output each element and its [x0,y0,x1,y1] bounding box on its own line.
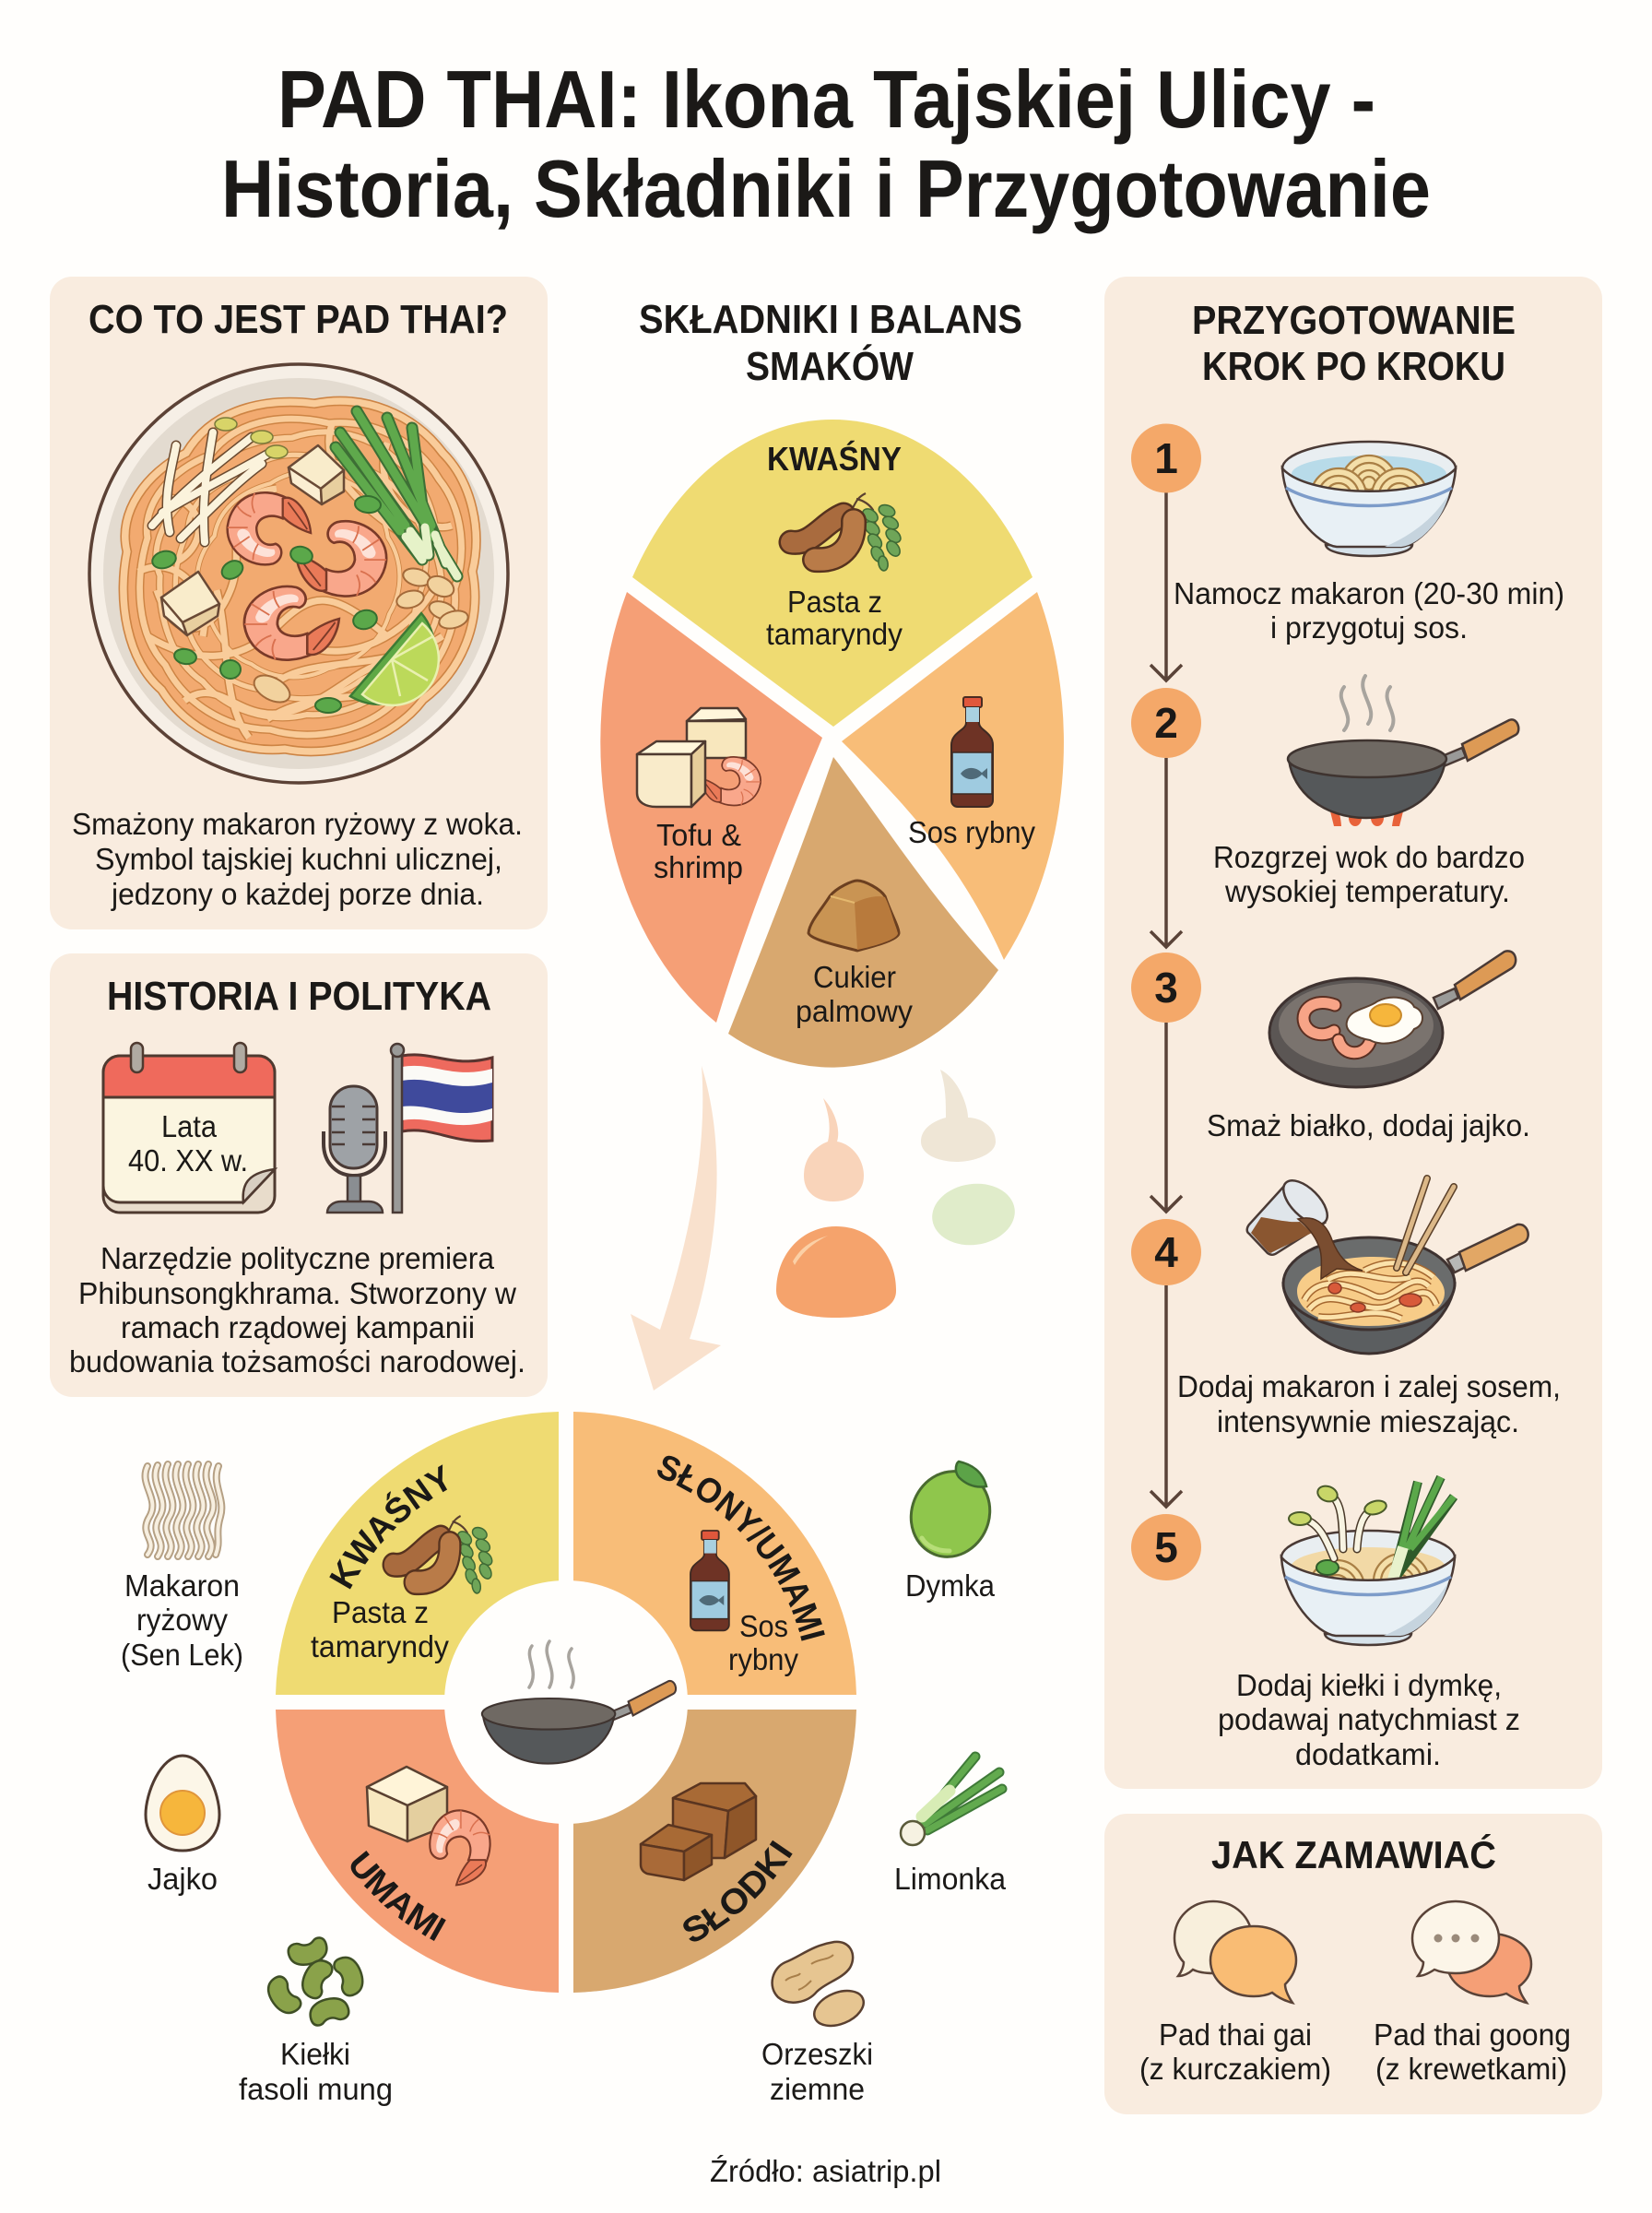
segment: cukier palmowy: Cukier [813,960,896,994]
ingredient: kielki fasoli mung: fasoli mung [239,2072,393,2106]
panel: jak zamawiac [1104,1814,1602,2114]
icon: thai flag [391,1044,492,1213]
calendar text [128,1109,248,1178]
segment: kwasny [632,420,1032,727]
ingredient: makaron ryzowy: Makaron [124,1568,240,1603]
green onions [336,411,457,576]
peanuts [250,565,470,707]
step 2: Rozgrzej wok do bardzo [1213,840,1525,874]
sector: slony umami [573,1412,856,1695]
chart: flavour pie [600,420,1064,1068]
sector labels [311,1595,798,1676]
text: pad thai goong [1374,2018,1571,2086]
ingredient: kielki fasoli mung: Kiełki [280,2037,350,2071]
text block: history: Phibunsongkhrama. Stworzony w [78,1276,516,1310]
text block: description: Symbol tajskiej kuchni ulicznej, [95,842,502,876]
sector labels: Pasta z [332,1595,429,1629]
decorative flavour blobs [776,1070,1019,1318]
heading: co to jest: CO TO JEST PAD THAI? [88,297,508,342]
text: pad thai goong: Pad thai goong [1374,2018,1571,2052]
icon: tofu and shrimp [637,708,761,807]
sector: slodki [573,1710,856,1993]
icon: pan with shrimp and egg [1269,951,1516,1087]
text block: history: budowania tożsamości narodowej. [69,1344,525,1379]
sprouts [152,432,268,542]
sector labels: rybny [728,1642,798,1676]
sector: umami [276,1710,559,1993]
step 2: wysokiej temperatury. [1224,874,1510,908]
icon: peanuts [773,1942,868,2032]
step 5: dodatkami. [1295,1737,1441,1771]
icon: microphone [324,1086,385,1213]
sector: slodki: SŁODKI [683,1840,793,1942]
ingredient: kielki fasoli mung [239,1936,393,2106]
step 2: 2 [1154,699,1178,747]
icon: speech bubbles chicken [1174,1901,1296,2003]
ingredient: limonka: Limonka [894,1862,1007,1896]
segment: cukier palmowy: palmowy [796,994,913,1028]
title: PAD THAI: Ikona Tajskiej Ulicy - [277,53,1375,145]
heading: skladniki i balans smakow [639,297,1022,389]
text block: history: ramach rządowej kampanii [121,1310,475,1344]
icon: tofu and shrimp [367,1767,490,1885]
shrimp [228,492,311,564]
text block: description: Smażony makaron ryżowy z woka. [72,807,523,841]
heading: skladniki i balans smakow: SMAKÓW [746,343,914,389]
segment: sos rybny: Sos rybny [908,815,1035,849]
heading: skladniki i balans smakow: SKŁADNIKI I BALANS [639,297,1022,342]
segment: kwasny: Pasta z [787,585,882,619]
heading: historia: HISTORIA I POLITYKA [107,974,491,1019]
step 4 [1131,1173,1561,1438]
wheel hub [444,1580,688,1824]
icon: rice noodles [145,1464,221,1556]
icon: bowl with sprouts and scallion [1281,1477,1455,1645]
text block: description [72,807,523,911]
icon: mung beans [262,1936,367,2027]
step 4: 4 [1154,1228,1178,1276]
ingredient: makaron ryzowy: ryżowy [136,1603,228,1637]
panel: co to jest pad thai [50,277,548,929]
icon: wok with steam [482,1641,676,1764]
icon: bowl with soaking noodles [1282,442,1456,556]
panel: historia i polityka [50,953,548,1397]
text block: description: jedzony o każdej porze dnia. [111,877,484,911]
noodles [124,401,476,751]
segment: kwasny: KWAŚNY [767,439,902,478]
sector labels: tamaryndy [311,1629,449,1663]
segment: tofu i krewetki: shrimp [654,850,743,884]
step 1: i przygotuj sos. [1270,610,1468,645]
ingredient: orzeszki ziemne: ziemne [770,2072,865,2106]
icon: sugar block [808,881,899,951]
sector: umami: UMAMI [350,1851,446,1941]
calendar text: 40. XX w. [128,1143,248,1178]
sector: kwasny: KWAŚNY [329,1464,447,1590]
step 4: Dodaj makaron i zalej sosem, [1177,1369,1561,1403]
illustration: plate of pad thai [89,364,508,783]
panel: przygotowanie krok po kroku [1104,277,1602,1789]
title: Historia, Składniki i Przygotowanie [221,143,1431,234]
arrow: faded flow to wheel [631,1066,721,1391]
step 2 [1131,676,1525,908]
text: pad thai gai [1139,2018,1331,2086]
ingredient: jajko [146,1756,219,1896]
title [221,53,1431,234]
segment: kwasny: tamaryndy [766,617,903,651]
icon: wok on flame [1288,676,1518,826]
tofu cubes [161,445,344,635]
ingredient: dymka: Dymka [905,1568,996,1603]
icon: calendar [103,1043,275,1213]
heading: przygotowanie: KROK PO KROKU [1202,344,1505,389]
ingredient: dymka [898,1460,1003,1603]
lime wedge [350,613,439,705]
segment: cukier palmowy [728,757,998,1068]
ingredient: jajko: Jajko [148,1862,218,1896]
ingredient: orzeszki ziemne: Orzeszki [761,2037,873,2071]
step 1: Namocz makaron (20-30 min) [1174,576,1564,610]
ingredient: orzeszki ziemne [761,1942,873,2106]
scallion pieces [150,495,382,713]
sector: slony umami: SŁONY/UMAMI [657,1455,825,1641]
step 5 [1131,1477,1520,1771]
sector labels: Sos [739,1609,788,1643]
ingredient: makaron ryzowy: (Sen Lek) [121,1638,243,1672]
source: Źródło: asiatrip.pl [710,2154,941,2188]
step 1 [1131,424,1564,645]
segment: sos rybny [842,592,1064,960]
icon: egg [146,1756,219,1851]
calendar text: Lata [161,1109,218,1143]
icon: lime [898,1460,1003,1568]
heading: przygotowanie: PRZYGOTOWANIE [1192,298,1516,343]
icon: speech bubbles shrimp [1412,1901,1531,2003]
text block: history: Narzędzie polityczne premiera [100,1241,495,1275]
text: pad thai gai: (z kurczakiem) [1139,2052,1331,2086]
segment: tofu i krewetki [600,592,822,1023]
step 5: Dodaj kiełki i dymkę, [1236,1668,1502,1702]
ingredient: limonka [894,1757,1007,1896]
text: pad thai gai: Pad thai gai [1159,2018,1312,2052]
step 5: 5 [1154,1523,1178,1571]
step 3: Smaż białko, dodaj jajko. [1207,1108,1530,1142]
icon: wok with noodles and sauce [1247,1173,1528,1354]
icon: spring onion [901,1757,1002,1845]
heading: przygotowanie [1192,298,1516,389]
step 4: intensywnie mieszając. [1217,1404,1519,1438]
text: pad thai goong: (z krewetkami) [1375,2052,1567,2086]
heading: jak zamawiac: JAK ZAMAWIAĆ [1211,1832,1496,1876]
icon: palm sugar blocks [641,1783,756,1880]
chart: flavour wheel [276,1412,856,1993]
segment: tofu i krewetki: Tofu & [656,818,741,852]
ingredient: makaron ryzowy [121,1464,243,1672]
step 3: 3 [1154,964,1178,1012]
step 3 [1131,951,1530,1142]
sector: kwasny [276,1412,559,1695]
arrows between steps [1150,492,1182,1507]
text block: history [69,1241,525,1379]
step 5: podawaj natychmiast z [1218,1702,1520,1736]
step 1: 1 [1154,434,1178,482]
